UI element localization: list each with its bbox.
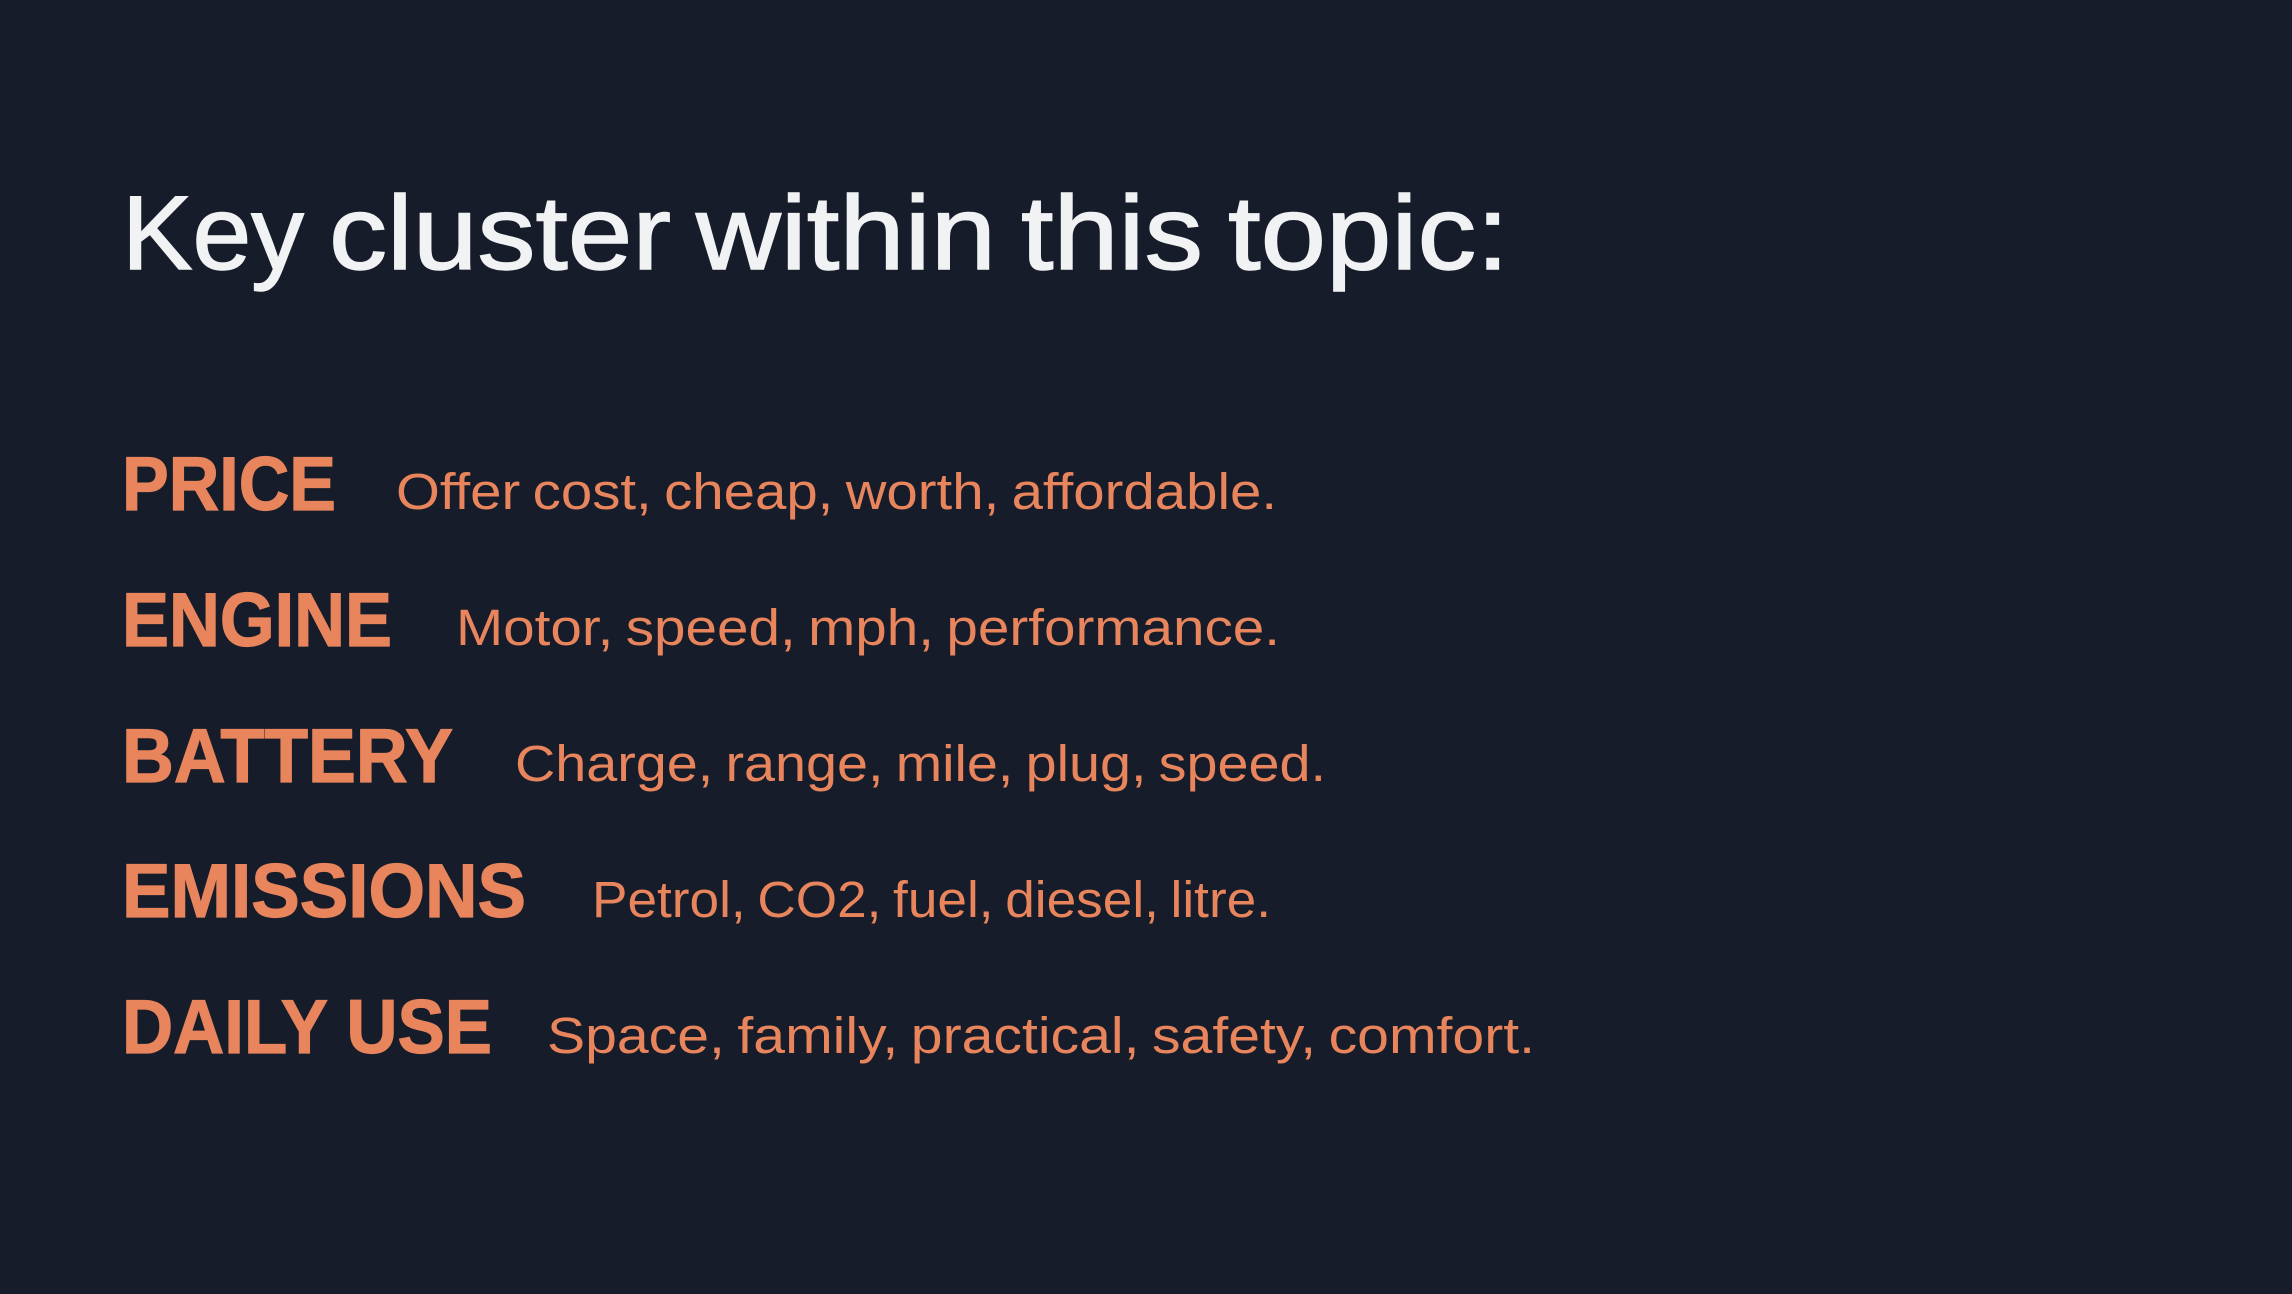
heading: price: PRICE bbox=[122, 442, 336, 527]
row: battery bbox=[122, 714, 1326, 799]
row: daily use bbox=[122, 985, 1535, 1070]
heading: engine: ENGINE bbox=[122, 578, 392, 663]
title: Key bbox=[122, 175, 304, 292]
heading: battery: BATTERY bbox=[122, 714, 453, 799]
keywords: daily use: Space, family, practical, safety, comfort. bbox=[547, 1007, 1535, 1064]
keywords: price: Offer cost, cheap, worth, affordable. bbox=[396, 463, 1277, 520]
title bbox=[122, 175, 1509, 292]
title: this bbox=[1021, 175, 1203, 292]
heading: daily use: DAILY USE bbox=[122, 985, 492, 1070]
row: emissions bbox=[122, 849, 1271, 934]
title: within bbox=[695, 175, 996, 292]
title: topic: bbox=[1228, 175, 1509, 292]
title: cluster bbox=[329, 175, 671, 292]
row: price bbox=[122, 442, 1277, 527]
keywords: engine: Motor, speed, mph, performance. bbox=[456, 599, 1280, 656]
keywords: emissions: Petrol, CO2, fuel, diesel, litre. bbox=[592, 871, 1271, 928]
heading: emissions: EMISSIONS bbox=[122, 849, 526, 934]
row: engine bbox=[122, 578, 1280, 663]
keywords: battery: Charge, range, mile, plug, speed. bbox=[515, 735, 1326, 792]
